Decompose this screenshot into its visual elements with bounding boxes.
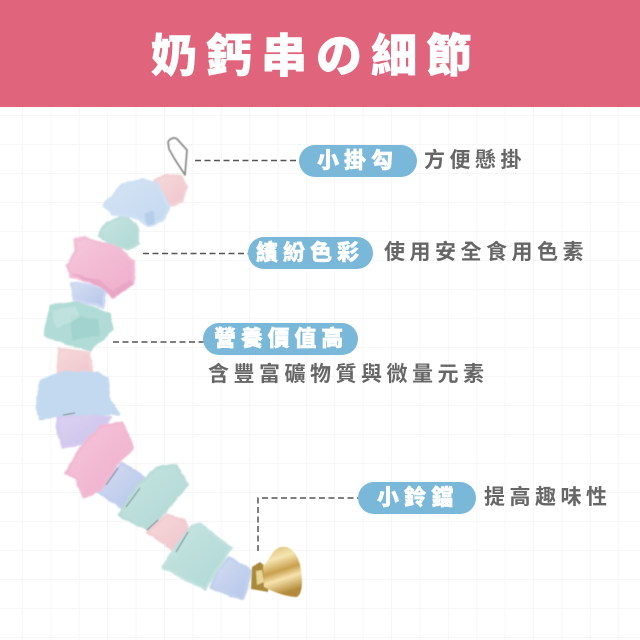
icon: carabiner hook: [168, 138, 187, 175]
leader line: bell: [258, 498, 358, 551]
description: bell: 提高趣味性: [484, 486, 612, 509]
label pill: hook: 小掛勾: [317, 148, 398, 173]
label pill: nutrition: [203, 323, 358, 355]
beads: lower strand: [37, 373, 251, 599]
leader line: nutrition: [113, 341, 205, 343]
header banner: [0, 0, 640, 107]
icon: gold bell: [251, 547, 302, 597]
label pill: colors: [248, 237, 373, 269]
label pill: bell: 小鈴鐺: [377, 485, 458, 510]
label pill: nutrition: 營養價值高: [214, 326, 348, 351]
description: nutrition: 含豐富礦物質與微量元素: [208, 363, 488, 386]
title: 奶鈣串の細節: [151, 30, 481, 82]
description: colors: 使用安全食用色素: [384, 241, 588, 264]
leader line: hook: [195, 160, 299, 162]
leader line: colors: [143, 252, 248, 254]
label pill: hook: [299, 145, 417, 177]
dark string gaps between beads: [63, 413, 188, 552]
beads: upper strand: [45, 175, 186, 374]
label pill: colors: 繽紛色彩: [256, 240, 364, 265]
description: hook: 方便懸掛: [424, 149, 526, 172]
label pill: bell: [358, 482, 476, 514]
